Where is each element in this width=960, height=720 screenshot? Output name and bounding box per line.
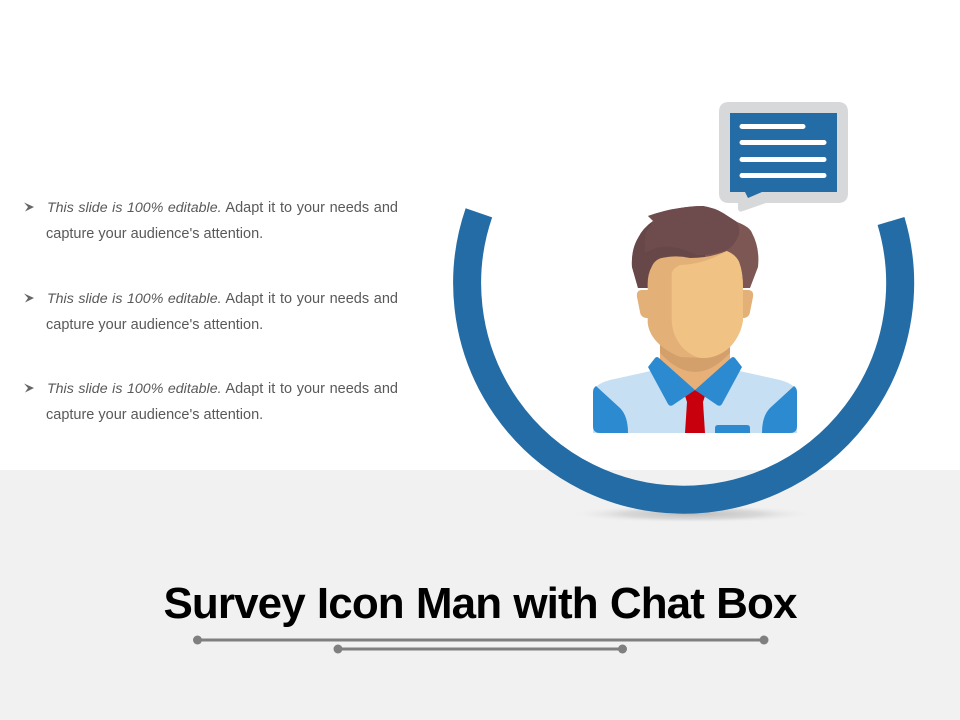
right collar	[695, 357, 742, 406]
neck	[660, 340, 730, 392]
chat box panel	[730, 113, 837, 198]
left collar	[648, 357, 695, 406]
bullet item 3	[24, 381, 398, 423]
text block: bullet list	[24, 200, 398, 423]
face shade	[648, 251, 743, 358]
hair top band	[645, 206, 739, 255]
shirt	[593, 370, 797, 433]
red tie	[685, 390, 705, 433]
title: Survey Icon Man with Chat Box	[163, 579, 797, 628]
hair	[632, 206, 758, 288]
hair left shade	[632, 221, 705, 288]
bullet item 1: This slide is 100% editable. Adapt it to your needs and	[47, 200, 398, 216]
icon: chat box	[719, 102, 848, 212]
right sleeve	[762, 386, 797, 433]
grey footer band	[0, 470, 960, 720]
blue open ring	[467, 213, 900, 500]
face	[672, 251, 743, 358]
bullet item 1	[24, 200, 398, 242]
icon: arrow bullet	[24, 294, 34, 302]
left sleeve	[593, 386, 628, 433]
ring shadow	[568, 505, 816, 523]
pocket	[715, 425, 750, 433]
neck light	[660, 353, 730, 392]
chat box frame	[719, 102, 848, 212]
neck front	[660, 340, 730, 372]
icon: arrow bullet	[24, 384, 34, 392]
bullet item 1: capture your audience's attention.	[46, 226, 263, 242]
ears	[637, 290, 650, 318]
bullet item 3: capture your audience's attention.	[46, 407, 263, 423]
bullet item 2: This slide is 100% editable. Adapt it to your needs and	[47, 291, 398, 307]
icon: arrow bullet	[24, 202, 34, 212]
bullet item 2	[24, 291, 398, 333]
title underline	[193, 636, 768, 654]
icon: man	[593, 206, 797, 433]
chat lines	[742, 126, 824, 176]
bullet item 2: capture your audience's attention.	[46, 317, 263, 333]
bullet item 3: This slide is 100% editable. Adapt it to your needs and	[47, 381, 398, 397]
